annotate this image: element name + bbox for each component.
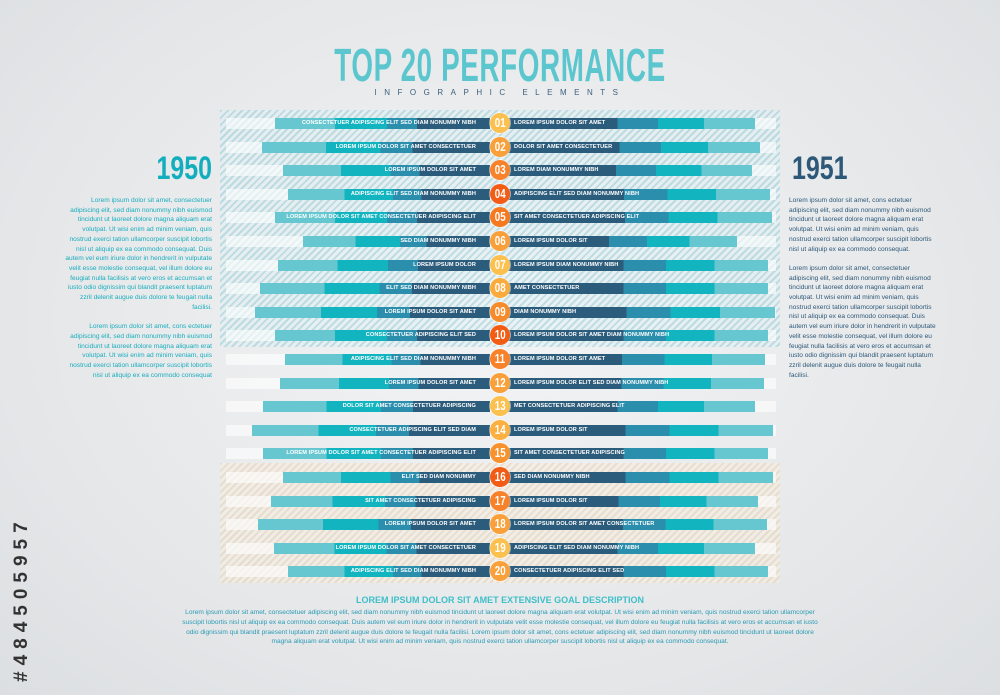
row 06 <box>226 230 776 252</box>
subtitle: INFOGRAPHIC ELEMENTS <box>375 88 625 97</box>
row 05: LOREM IPSUM DOLOR SIT AMET CONSECTETUER ADIPISCING ELIT <box>286 214 476 220</box>
row 12: 12 <box>495 375 505 390</box>
row 06: LOREM IPSUM DOLOR SIT <box>514 238 588 244</box>
row 15: SIT AMET CONSECTETUER ADIPISCING <box>514 450 625 456</box>
row 03 <box>226 159 776 181</box>
row 09: 09 <box>495 304 505 319</box>
row 14 <box>226 420 776 440</box>
row 11: LOREM IPSUM DOLOR SIT AMET <box>514 356 605 362</box>
text block: left: Lorem ipsum dolor sit amet, cons ectetuer adipiscing elit, sed diam nonummy nibh euismod tincidunt ut laoreet dolore magna aliquam erat volutpat. Ut wisi enim ad minim veniam, quis nostrud exerci tation ullamcorper suscipit lobortis nisl ut aliquip ex ea commodo consequat <box>69 323 212 379</box>
heading: 1951: 1951 <box>792 150 848 186</box>
row 07: LOREM IPSUM DOLOR <box>413 262 476 268</box>
row 12: LOREM IPSUM DOLOR SIT AMET <box>385 380 476 386</box>
row 05 <box>226 206 776 228</box>
text block: left <box>65 197 212 379</box>
row 04: 04 <box>495 186 505 201</box>
row 04: ADIPISCING ELIT SED DIAM NONUMMY NIBH <box>351 191 476 197</box>
text block: bottom: Lorem ipsum dolor sit amet, consectetuer adipiscing elit, sed diam nonummy nibh euismod tincidunt ut laoreet dolore magna aliquam erat volutpat. Ut wisi enim ad minim veniam, quis nostrud exerci tation ullamcorper suscipit lobortis nisl ut aliquip ex ea commodo consequat. Duis autem vel eum iriure dolor in hendrerit in vulputate velit esse molestie consequat, vel illum dolore eu feugiat nulla facilisis at vero eros et accumsan et iusto odio dignissim qui blandit praesent luptatum zzril delenit augue duis dolore te feugait nulla facilisi. Lorem ipsum dolor sit amet, cons ectetuer adipiscing elit, sed diam nonummy nibh euismod tincidunt ut laoreet dolore magna aliquam erat volutpat. Ut wisi enim ad minim veniam, quis nostrud exerci tation ullamcorper suscipit lobortis nisl ut aliquip ex ea commodo consequat. <box>182 609 818 645</box>
row 10 <box>226 324 776 346</box>
row 20 <box>226 560 776 582</box>
panel: blue hatched background <box>220 110 780 347</box>
row 05: 05 <box>495 209 505 224</box>
row 08 <box>226 277 776 299</box>
row 07: 07 <box>495 257 505 272</box>
row 09: LOREM IPSUM DOLOR SIT AMET <box>385 309 476 315</box>
text block: right: Lorem ipsum dolor sit amet, cons ectetuer adipiscing elit, sed diam nonummy nibh euismod tincidunt ut laoreet dolore magna aliquam erat volutpat. Ut wisi enim ad minim veniam, quis nostrud exerci tation ullamcorper suscipit lobortis nisl ut aliquip ex ea commodo consequat. <box>789 197 932 253</box>
row 03: 03 <box>495 162 505 177</box>
row 17: 17 <box>495 493 505 508</box>
title: TOP 20 PERFORMANCE <box>334 39 666 91</box>
heading: goal description: LOREM IPSUM DOLOR SIT AMET EXTENSIVE GOAL DESCRIPTION <box>356 595 644 605</box>
row 11 <box>226 349 776 369</box>
row 15: LOREM IPSUM DOLOR SIT AMET CONSECTETUER ADIPISCING ELIT <box>286 450 476 456</box>
panel: beige hatched background <box>220 463 780 583</box>
row 06: 06 <box>495 233 505 248</box>
row 08: ELIT SED DIAM NONUMMY NIBH <box>386 285 476 291</box>
heading: 1950: 1950 <box>156 150 212 186</box>
row 13: 13 <box>495 398 505 413</box>
row 12 <box>226 373 776 393</box>
row 08: AMET CONSECTETUER <box>514 285 579 291</box>
row 07 <box>226 254 776 276</box>
row 01: CONSECTETUER ADIPISCING ELIT SED DIAM NONUMMY NIBH <box>302 120 476 126</box>
row 14: 14 <box>495 422 505 437</box>
row 20: CONSECTETUER ADIPISCING ELIT SED <box>514 568 624 574</box>
row 18: LOREM IPSUM DOLOR SIT AMET CONSECTETUER <box>514 521 654 527</box>
row 03: LOREM IPSUM DOLOR SIT AMET <box>385 167 476 173</box>
row 10: LOREM IPSUM DOLOR SIT AMET DIAM NONUMMY NIBH <box>514 332 669 338</box>
row 17: LOREM IPSUM DOLOR SIT <box>514 498 588 504</box>
text block: right: Lorem ipsum dolor sit amet, consectetuer adipiscing elit, sed diam nonummy nibh euismod tincidunt ut laoreet dolore magna aliquam erat volutpat. Ut wisi enim ad minim veniam, quis nostrud exerci tation ullamcorper suscipit lobortis nisl ut aliquip ex ea commodo consequat. Duis autem vel eum iriure dolor in hendrerit in vulputate velit esse molestie consequat, vel illum dolore eu feugiat nulla facilisis at vero eros et accumsan et iusto odio dignissim qui blandit praesent luptatum zzril delenit augue duis dolore te feugait nulla facilisi. <box>789 265 936 379</box>
row 02: LOREM IPSUM DOLOR SIT AMET CONSECTETUER <box>336 144 476 150</box>
row 16: ELIT SED DIAM NONUMMY <box>402 474 476 480</box>
row 08: 08 <box>495 280 505 295</box>
row 17: SIT AMET CONSECTETUER ADIPISCING <box>365 498 476 504</box>
row 01: 01 <box>495 115 505 130</box>
row 01 <box>226 112 776 134</box>
row 15: 15 <box>495 445 505 460</box>
row 16 <box>226 466 776 488</box>
row 09: DIAM NONUMMY NIBH <box>514 309 576 315</box>
row 13 <box>226 396 776 416</box>
row 15 <box>226 442 776 464</box>
row 07: LOREM IPSUM DIAM NONUMMY NIBH <box>514 262 618 268</box>
row 11: ADIPISCING ELIT SED DIAM NONUMMY NIBH <box>351 356 476 362</box>
row 04: ADIPISCING ELIT SED DIAM NONUMMY NIBH <box>514 191 639 197</box>
row 19: 19 <box>495 540 505 555</box>
row 12: LOREM IPSUM DOLOR ELIT SED DIAM NONUMMY NIBH <box>514 380 668 386</box>
row 06: SED DIAM NONUMMY NIBH <box>400 238 476 244</box>
row 19: ADIPISCING ELIT SED DIAM NONUMMY NIBH <box>514 545 639 551</box>
row 05: SIT AMET CONSECTETUER ADIPISCING ELIT <box>514 214 639 220</box>
chart: ranked bars <box>226 112 776 582</box>
row 10: CONSECTETUER ADIPISCING ELIT SED <box>366 332 476 338</box>
row 13: MET CONSECTETUER ADIPISCING ELIT <box>514 403 625 409</box>
row 17 <box>226 490 776 512</box>
row 09 <box>226 301 776 323</box>
row 16: 16 <box>495 469 505 484</box>
row 20: 20 <box>495 563 505 578</box>
row 16: SED DIAM NONUMMY NIBH <box>514 474 590 480</box>
row 02 <box>226 136 776 158</box>
row 14: CONSECTETUER ADIPISCING ELIT SED DIAM <box>349 427 476 433</box>
row 10: 10 <box>495 327 505 342</box>
row 13: DOLOR SIT AMET CONSECTETUER ADIPISCING <box>343 403 476 409</box>
row 02: 02 <box>495 139 505 154</box>
row 14: LOREM IPSUM DOLOR SIT <box>514 427 588 433</box>
text block: left: Lorem ipsum dolor sit amet, consectetuer adipiscing elit, sed diam nonummy nibh euismod tincidunt ut laoreet dolore magna aliquam erat volutpat. Ut wisi enim ad minim veniam, quis nostrud exerci tation ullamcorper suscipit lobortis nisl ut aliquip ex ea commodo consequat. Duis autem vel eum iriure dolor in hendrerit in vulputate velit esse molestie consequat, vel illum dolore eu feugiat nulla facilisis at vero eros et accumsan et iusto odio dignissim qui blandit praesent luptatum zzril delenit augue duis dolore te feugait nulla facilisi. <box>65 197 212 311</box>
row 02: DOLOR SIT AMET CONSECTETUER <box>514 144 612 150</box>
watermark id: #484505957 <box>11 516 32 682</box>
row 18: LOREM IPSUM DOLOR SIT AMET <box>385 521 476 527</box>
text block: right <box>789 197 936 379</box>
row 03: LOREM DIAM NONUMMY NIBH <box>514 167 599 173</box>
row 19: LOREM IPSUM DOLOR SIT AMET CONSECTETUER <box>336 545 476 551</box>
row 18: 18 <box>495 516 505 531</box>
row 19 <box>226 537 776 559</box>
row 11: 11 <box>495 351 505 366</box>
row 20: ADIPISCING ELIT SED DIAM NONUMMY NIBH <box>351 568 476 574</box>
row 01: LOREM IPSUM DOLOR SIT AMET <box>514 120 605 126</box>
row 18 <box>226 513 776 535</box>
row 04 <box>226 183 776 205</box>
